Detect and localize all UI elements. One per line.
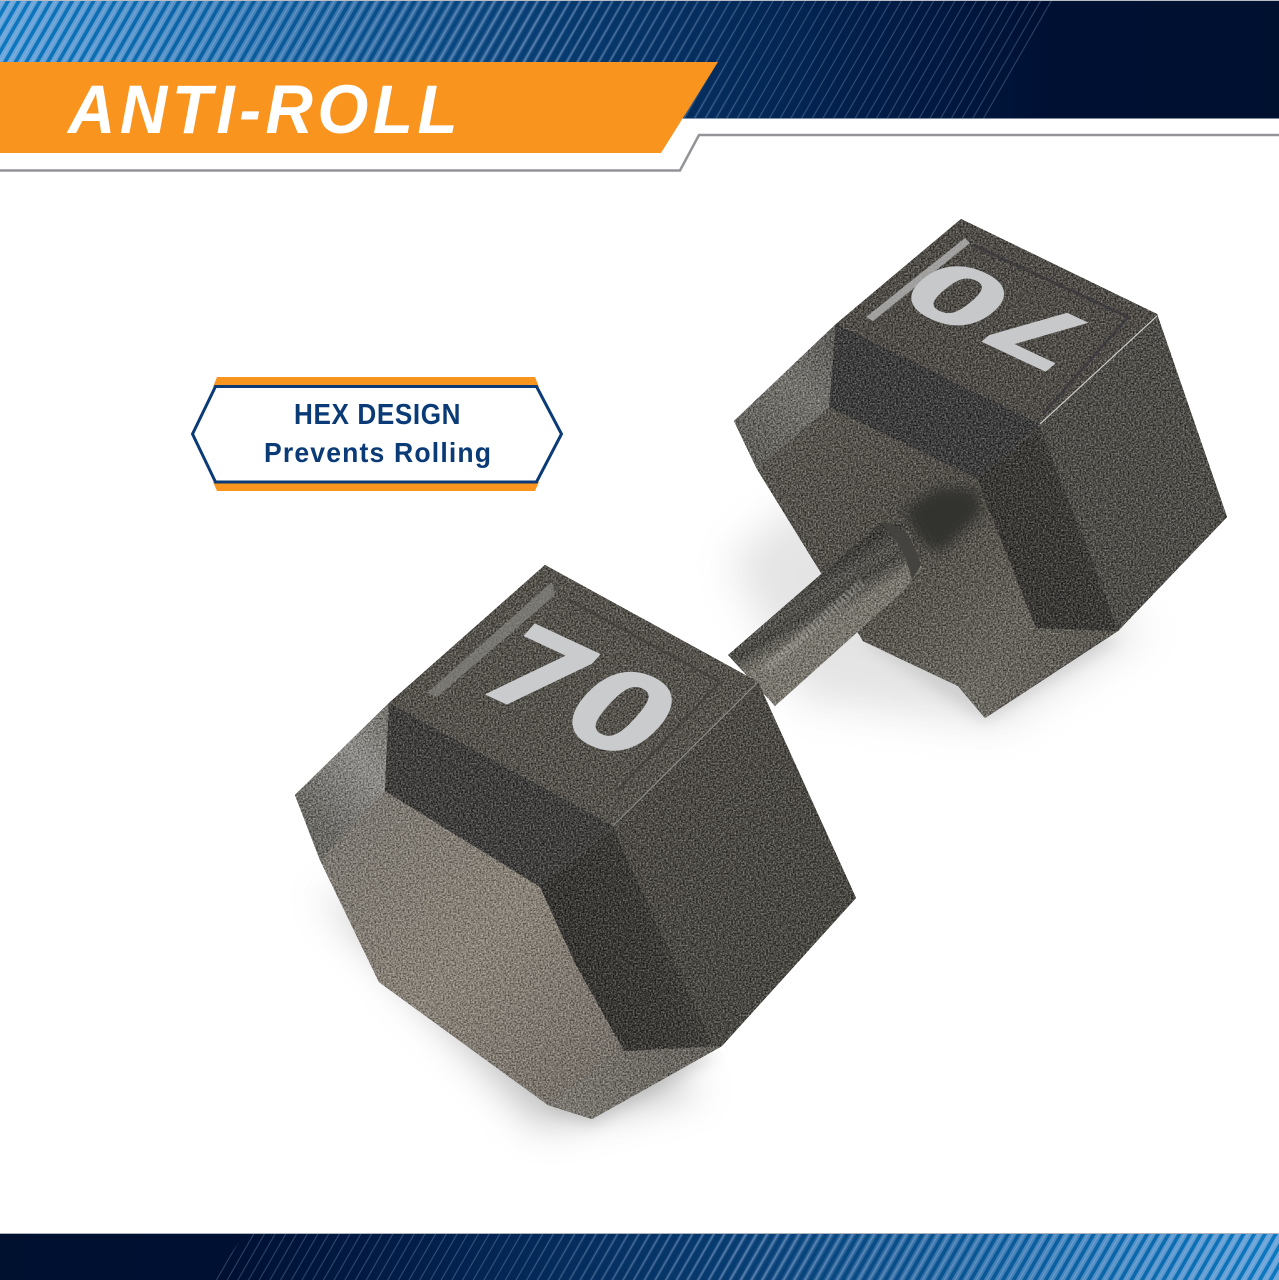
title banner [0,62,718,153]
header outline stroke [0,135,1279,170]
back head: edge highlight [1040,316,1157,424]
back head: dark wedge [978,427,1118,631]
handle: specular highlight [768,582,862,668]
back head: light facet [734,324,836,469]
footer band with diagonal stripes [0,1233,1279,1280]
back head: top recess frame [973,245,1128,414]
back head: top face [836,219,1157,424]
dumbbell shadows [320,500,1150,1125]
back head: embossed strip [866,238,970,321]
dumbbell: front head [295,565,856,1119]
back head: end face [757,407,1036,686]
handle: collar [880,523,921,580]
back head: right face [1040,314,1227,631]
back head: silhouette [734,219,1227,718]
dumbbell: handle [728,523,922,706]
callout text: Prevents Rolling [264,436,491,468]
front head: right face [613,682,856,1046]
front head: top face [389,565,758,826]
back head: bottom facet [958,628,1118,718]
front head: bottom facet [548,1046,722,1119]
front head: number 70: 70 [447,603,709,786]
callout: hex design [192,377,562,491]
front head: silhouette [295,565,856,1119]
front head: end face [320,791,624,1105]
callout heading: HEX DESIGN [294,398,461,430]
front head: dark wedge [540,829,712,1051]
header band with diagonal stripes [0,0,1279,119]
front head: top recess frame [567,599,720,791]
front head: embossed strip [427,582,555,697]
title text: ANTI-ROLL [66,71,458,148]
front head: light facet [295,703,389,860]
back head: dark bevel [829,324,1040,479]
back head: recess behind handle [904,488,982,552]
front head: edge highlight [613,682,758,826]
front head: dark bevel [385,703,613,887]
dumbbell: back head [734,219,1227,718]
back head: number 70: 70 [876,240,1123,388]
